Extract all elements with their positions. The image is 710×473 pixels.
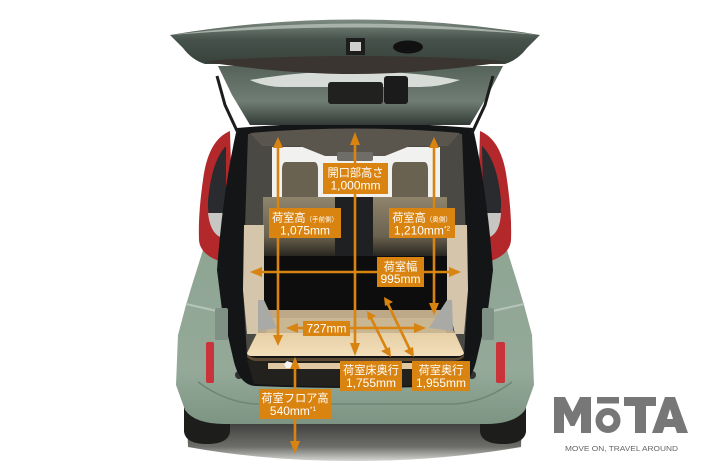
label: cargo height rear: 1,210mm [394,224,444,238]
logo tagline: MOVE ON, TRAVEL AROUND [565,444,679,453]
label: cargo height rear: *2 [444,226,450,232]
arrow: floor depth [367,311,391,357]
arrow: opening height [350,132,360,356]
striker left [215,308,228,340]
striker right [482,308,494,340]
rear step [247,360,464,386]
gas strut left [217,76,238,133]
tail lamp right [478,131,511,262]
label: cargo depth: 1,955mm [416,376,466,390]
arrow: rear height right [429,137,439,315]
label: floor depth [340,361,402,391]
label: floor depth: 荷室床奥行 [343,363,399,377]
logo: MOTA [554,397,688,453]
wheel housing left [258,300,277,331]
side wall left [243,225,264,334]
bumper crease [198,382,512,404]
label: cargo depth: 荷室奥行 [419,363,463,377]
interior [243,130,468,355]
side wall right [447,225,468,334]
arrow: floor height [290,357,300,454]
floor edge [247,354,464,361]
gas strut right [472,76,493,133]
arrow: cargo depth [384,297,414,357]
tailgate top rim [170,24,540,35]
high mount camera [384,76,408,104]
far floor [257,310,455,334]
logo T [624,397,656,433]
wiper cover [328,82,383,104]
seat right [373,162,447,262]
center console [335,197,373,257]
ground shadow [187,420,522,461]
latch icon [346,38,365,55]
label: cargo height front [269,208,341,238]
roof lining [250,128,460,156]
logo A [652,397,688,433]
tail lamp left [199,131,232,262]
label: opening height: 開口部高さ [328,166,383,180]
rear window view [272,147,440,232]
body crease left [186,304,217,311]
seat left [263,162,335,262]
tires [184,405,526,444]
body crease right [493,304,524,311]
label: cargo height front: 1,075mm [280,224,330,238]
logo O bar [597,397,619,404]
latch [284,361,293,368]
label: opening height [323,163,388,194]
handle recess [393,40,423,54]
door frame [217,123,493,388]
arrow: 727mm width [286,323,426,333]
wheel housing right [429,300,453,331]
label: cargo depth [412,361,470,391]
sensor right [468,371,476,379]
label: cargo height rear [389,208,455,238]
far floor front band [265,318,447,334]
tailgate outer panel [170,20,540,64]
label: cargo height front: 荷室高（手前側） [272,212,338,224]
arrow: cargo width [250,267,461,277]
reflector right [496,342,505,383]
tailgate dark lining [205,56,505,74]
sensor left [235,371,243,379]
upper tailgate glass panel [218,66,503,125]
tailgate window [250,71,460,87]
label: cargo width [377,257,424,287]
car rear photo illustration [170,20,540,461]
label: cargo width: 995mm [380,272,421,286]
label: 727mm: 727mm [306,322,347,336]
label: cargo width: 荷室幅 [384,260,417,274]
near floor [247,333,464,356]
dark cabin below seats [264,256,447,312]
arrow: rear height left [273,137,283,346]
reflector left [206,342,214,383]
label: floor height [259,389,331,419]
logo O ring [599,412,617,430]
label: cargo height rear: 荷室高（奥側） [392,212,452,224]
label: opening height: 1,000mm [330,178,381,192]
label: floor height: 荷室フロア高 [261,392,329,405]
mirror [337,152,373,161]
car body [176,250,534,424]
label: floor depth: 1,755mm [346,376,396,390]
sill plate [268,363,438,369]
label: floor height: 540mm [270,404,310,418]
label: floor height: *1 [310,406,316,413]
